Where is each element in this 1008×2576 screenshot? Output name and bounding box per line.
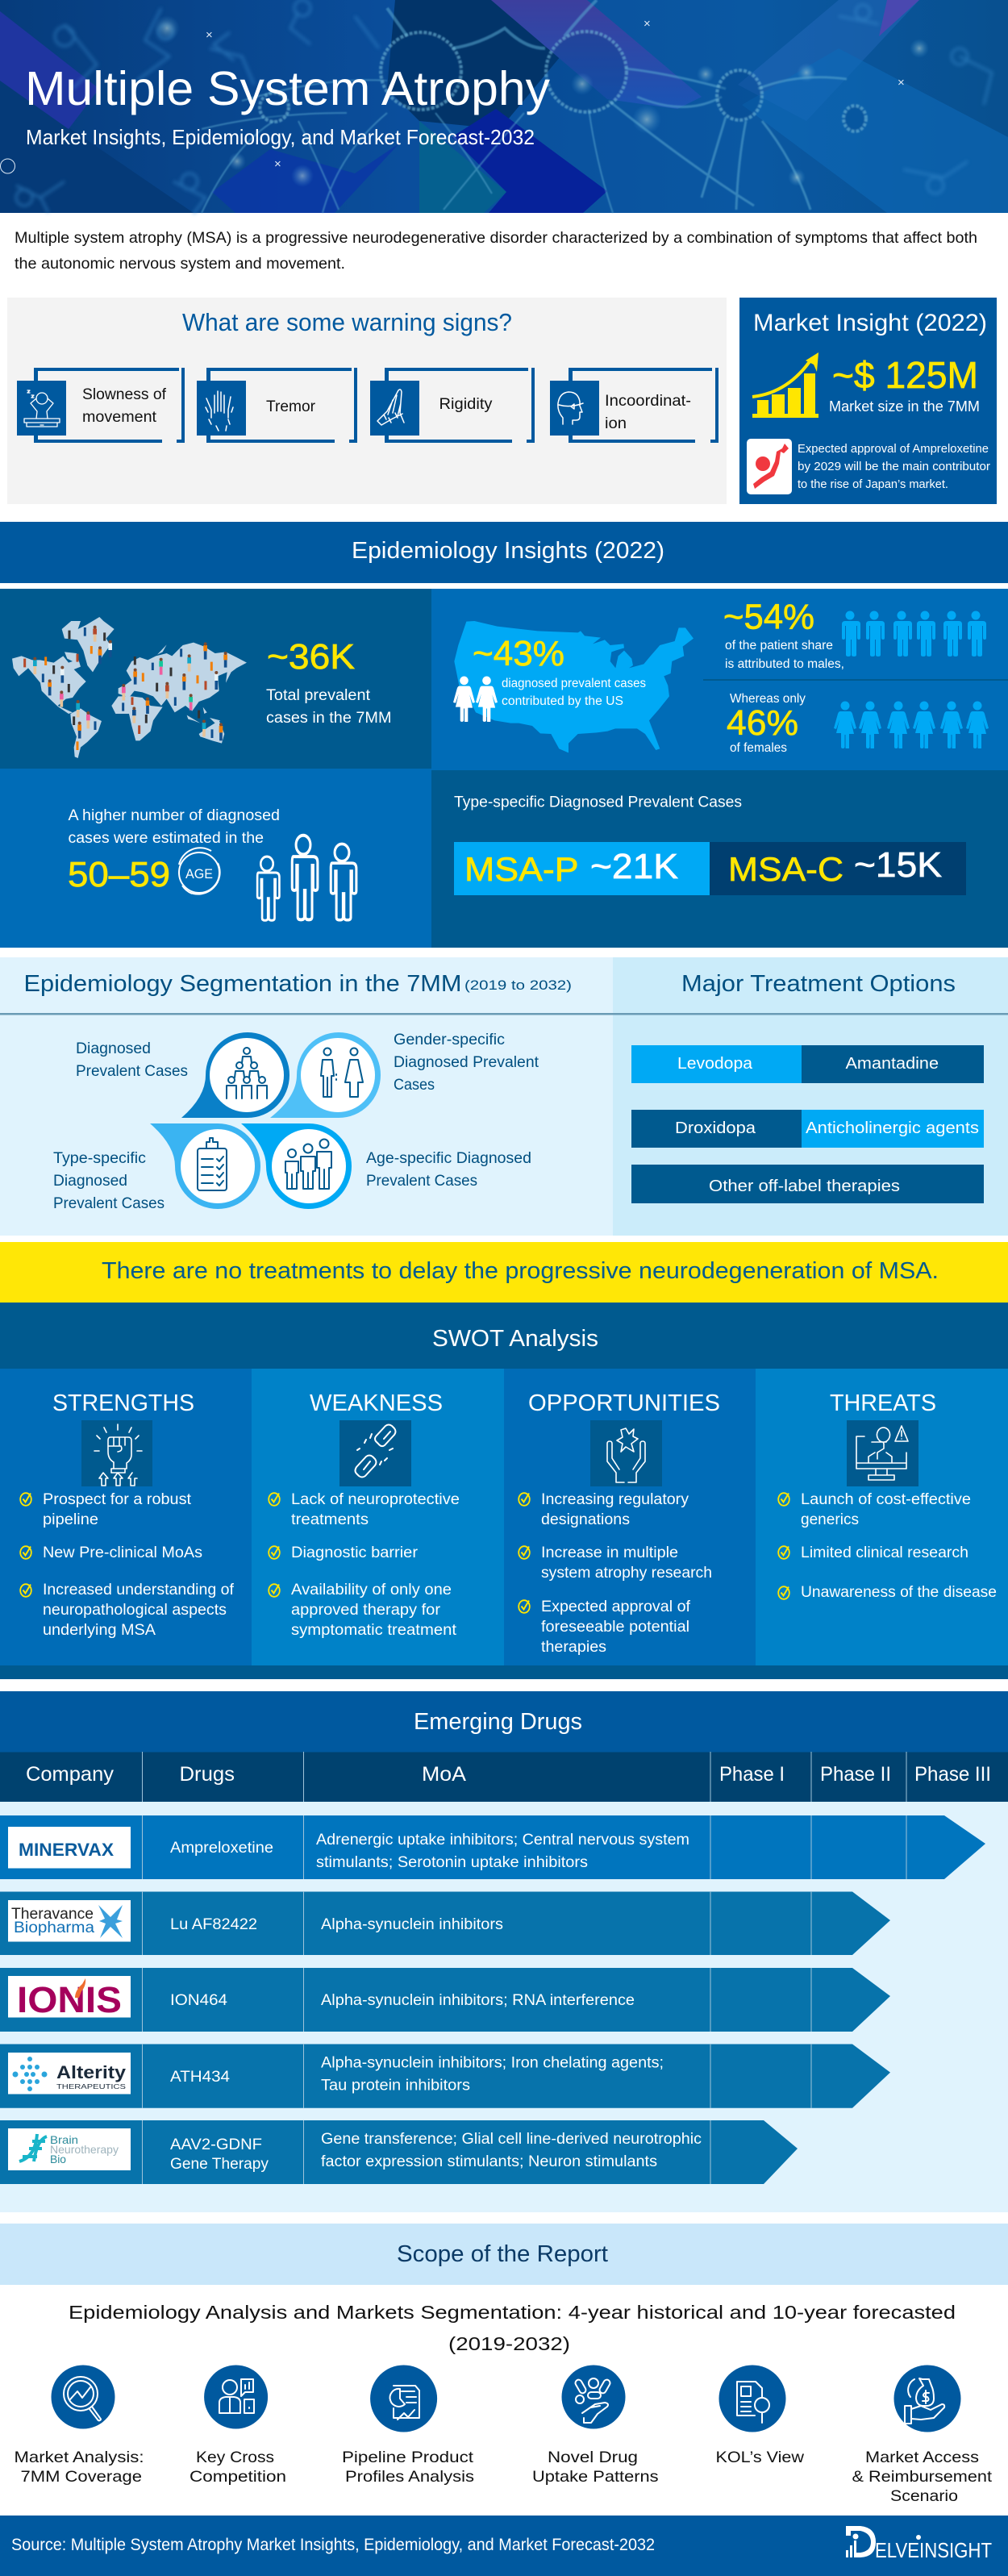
scope item: market analysis: Market Analysis: xyxy=(15,2449,144,2466)
header background: × xyxy=(644,17,651,31)
icon: row of women xyxy=(834,702,989,749)
column: weakness: WEAKNESS xyxy=(310,1390,443,1416)
column: strengths xyxy=(0,1369,252,1665)
card: slowness of movement: Slowness of xyxy=(82,386,167,403)
heading band: epidemiology insights xyxy=(0,522,1008,583)
scope summary text: (2019-2032) xyxy=(448,2333,570,2354)
icon: age badge xyxy=(179,848,220,894)
row: ion464: ION464 xyxy=(170,1992,227,2009)
row: ath434 xyxy=(0,2044,890,2108)
scope summary text: Epidemiology Analysis and Markets Segmentation: 4-year historical and 10-year forecasted xyxy=(69,2302,956,2323)
treatment: droxidopa xyxy=(631,1110,802,1148)
market size label: Market size in the 7MM xyxy=(829,398,980,415)
scope item: market access and reimbursement: Market Access xyxy=(865,2449,979,2466)
row: lu af82422: Lu AF82422 xyxy=(170,1916,257,1933)
total prevalent label: cases in the 7MM xyxy=(266,710,392,727)
logo: brain neurotherapy bio: Bio xyxy=(50,2153,66,2165)
label: age-specific cases: Age-specific Diagnosed xyxy=(366,1150,531,1167)
label: diagnosed prevalent cases xyxy=(76,1040,188,1080)
scope item: key cross competition xyxy=(190,2365,286,2486)
column: weakness: Availability of only one xyxy=(291,1582,452,1599)
logo: theravance biopharma: Biopharma xyxy=(14,1919,94,1936)
logo: minervax xyxy=(8,1827,131,1868)
label: gender-specific cases: Diagnosed Prevalent xyxy=(394,1054,539,1071)
msa-c box: MSA-C xyxy=(728,850,843,888)
scope item: novel drug uptake xyxy=(532,2365,659,2486)
scope item: kol's view xyxy=(716,2365,805,2466)
scope item: key cross competition: Competition xyxy=(190,2468,286,2486)
row: ampreloxetine: Ampreloxetine xyxy=(170,1840,273,1857)
card: slowness of movement: movement xyxy=(82,409,157,426)
msa-p box: MSA-P xyxy=(464,850,579,888)
male share label: is attributed to males, xyxy=(725,657,844,671)
column: strengths: Increased understanding of xyxy=(43,1582,235,1599)
card: incoordination: ion xyxy=(605,415,627,432)
type-specific heading: Type-specific Diagnosed Prevalent Cases xyxy=(454,794,742,811)
panel: type-specific cases xyxy=(431,770,1008,948)
msa-c box xyxy=(710,842,966,895)
world map with people xyxy=(12,617,247,758)
age text: A higher number of diagnosed xyxy=(68,807,280,824)
us share label: contributed by the US xyxy=(502,694,623,708)
segmentation heading: (2019 to 2032) xyxy=(464,977,572,993)
table header: Company xyxy=(26,1763,115,1786)
row: ath434: Tau protein inhibitors xyxy=(321,2078,470,2095)
msa-c box: ~15K xyxy=(854,845,942,885)
column: threats: generics xyxy=(801,1511,859,1528)
scope item: kol's view: KOL’s View xyxy=(716,2449,805,2466)
column: strengths: pipeline xyxy=(43,1511,98,1528)
row: ion464 xyxy=(0,1968,890,2032)
icon: three people outline xyxy=(257,836,356,920)
panel: major treatment options xyxy=(613,957,1008,1236)
column: strengths: Prospect for a robust xyxy=(43,1491,192,1508)
column: opportunities: therapies xyxy=(541,1639,606,1656)
logo: delveinsight: ELVEINSIGHT xyxy=(875,2538,992,2562)
us map xyxy=(454,621,694,752)
column: opportunities: OPPORTUNITIES xyxy=(528,1390,720,1416)
column: weakness: treatments xyxy=(291,1511,369,1528)
label: age-specific cases: Prevalent Cases xyxy=(366,1173,477,1190)
treatment: amantadine xyxy=(802,1045,984,1083)
logo: alterity xyxy=(8,2053,131,2094)
scope item: market analysis: 7MM Coverage xyxy=(21,2468,142,2486)
table header: Phase I xyxy=(719,1763,785,1786)
table header: MoA xyxy=(422,1763,466,1786)
table header: Phase III xyxy=(914,1763,991,1786)
column: weakness: approved therapy for xyxy=(291,1602,441,1619)
segmentation heading: Epidemiology Segmentation in the 7MM xyxy=(24,971,461,997)
treatment: other off-label therapies xyxy=(631,1165,984,1203)
icon: age badge: AGE xyxy=(185,866,213,882)
drop: gender-specific cases xyxy=(270,1032,381,1118)
logo: alterity: THERAPEUTICS xyxy=(56,2083,126,2090)
scope item: pipeline product profiles: Pipeline Product xyxy=(342,2449,474,2466)
treatment heading: Major Treatment Options xyxy=(681,971,956,997)
scope item: market analysis xyxy=(15,2365,144,2486)
column: opportunities: Increasing regulatory xyxy=(541,1491,689,1508)
scope item: market access and reimbursement: Scenario xyxy=(890,2487,958,2505)
age range value: 50–59 xyxy=(68,855,170,894)
label: diagnosed prevalent cases: Diagnosed xyxy=(76,1040,151,1057)
column: strengths: STRENGTHS xyxy=(52,1390,194,1416)
label: type-specific cases xyxy=(53,1150,165,1212)
title: Multiple System Atrophy xyxy=(25,62,551,115)
logo: delveinsight xyxy=(846,2526,992,2562)
header banner xyxy=(0,0,1008,214)
male share label: of the patient share xyxy=(725,639,833,652)
panel: emerging drugs xyxy=(0,1691,1008,2212)
column: strengths: New Pre-clinical MoAs xyxy=(43,1544,202,1561)
panel: total prevalent cases xyxy=(0,589,431,769)
row: ampreloxetine: Adrenergic uptake inhibitors; Central nervous system xyxy=(316,1832,689,1849)
card: rigidity: Rigidity xyxy=(439,396,493,413)
drop: age-specific cases xyxy=(241,1123,352,1209)
market size value: ~$ 125M xyxy=(832,354,978,396)
card: tremor xyxy=(197,368,357,443)
female share value: 46% xyxy=(727,703,798,743)
scope item: key cross competition: Key Cross xyxy=(196,2449,274,2466)
panel: age group xyxy=(0,769,431,948)
column: opportunities xyxy=(504,1369,756,1665)
column: threats: THREATS xyxy=(830,1390,936,1416)
subtitle: Market Insights, Epidemiology, and Market Forecast-2032 xyxy=(26,125,535,149)
row: ion464: Alpha-synuclein inhibitors; RNA interference xyxy=(321,1992,635,2009)
age text: cases were estimated in the xyxy=(68,830,264,847)
panel: epidemiology segmentation xyxy=(0,957,613,1236)
footer xyxy=(0,2516,1008,2576)
logo: ionis: IONIS xyxy=(17,1979,122,2020)
age text xyxy=(68,807,280,847)
scope item: market access and reimbursement xyxy=(852,2365,993,2505)
heading band: scope of the report: Scope of the Report xyxy=(397,2241,608,2267)
column: opportunities: designations xyxy=(541,1511,630,1528)
drop: diagnosed prevalent cases xyxy=(181,1032,289,1118)
label: type-specific cases: Diagnosed xyxy=(53,1173,127,1190)
logo: theravance biopharma xyxy=(8,1900,131,1942)
column: opportunities: Increase in multiple xyxy=(541,1544,678,1561)
logo: brain neurotherapy bio: Neurotherapy xyxy=(50,2143,119,2156)
header background: × xyxy=(274,157,281,171)
label: gender-specific cases: Cases xyxy=(394,1077,435,1094)
label: gender-specific cases: Gender-specific xyxy=(394,1032,505,1048)
emerging drugs heading xyxy=(0,1691,1008,1753)
icon: growth chart xyxy=(752,352,818,418)
column: opportunities: Expected approval of xyxy=(541,1599,691,1615)
emerging drugs heading: Emerging Drugs xyxy=(414,1709,582,1735)
callout: no treatments: There are no treatments to delay the progressive neurodegeneration of MSA. xyxy=(102,1258,939,1284)
us share label: diagnosed prevalent cases xyxy=(502,677,646,690)
card: incoordination xyxy=(550,368,719,443)
column: weakness xyxy=(252,1369,504,1665)
panel: market insight xyxy=(739,298,997,504)
table header: Phase II xyxy=(820,1763,891,1786)
treatment: levodopa: Levodopa xyxy=(677,1055,753,1073)
treatment: other off-label therapies: Other off-label therapies xyxy=(709,1178,900,1195)
japan note: to the rise of Japan’s market. xyxy=(798,478,948,491)
total prevalent label xyxy=(266,687,392,727)
japan note: by 2029 will be the main contributor xyxy=(798,461,990,473)
label: type-specific cases: Prevalent Cases xyxy=(53,1195,165,1212)
msa-p box xyxy=(454,842,710,895)
row: lu af82422 xyxy=(0,1891,890,1955)
row: aav2-gdnf gene therapy: factor expression stimulants; Neuron stimulants xyxy=(321,2153,657,2170)
treatment: levodopa xyxy=(631,1045,802,1083)
treatment: amantadine: Amantadine xyxy=(845,1055,939,1073)
source text: Source: Multiple System Atrophy Market Insights, Epidemiology, and Market Forecast-2032 xyxy=(11,2536,655,2554)
card: incoordination: Incoordinat- xyxy=(605,393,691,410)
intro text xyxy=(15,229,977,273)
label: diagnosed prevalent cases: Prevalent Cases xyxy=(76,1063,188,1080)
scope item: market access and reimbursement: & Reimbursement xyxy=(852,2468,993,2486)
row: aav2-gdnf gene therapy: AAV2-GDNF xyxy=(170,2136,262,2153)
column: weakness: symptomatic treatment xyxy=(291,1622,457,1639)
row: aav2-gdnf gene therapy: Gene transference; Glial cell line-derived neurotrophic xyxy=(321,2131,702,2148)
row: lu af82422: Alpha-synuclein inhibitors xyxy=(321,1916,503,1933)
us share value: ~43% xyxy=(473,634,564,673)
column: strengths: neuropathological aspects xyxy=(43,1602,227,1619)
table header xyxy=(0,1752,1008,1802)
japan note: Expected approval of Ampreloxetine xyxy=(798,443,989,456)
column: threats xyxy=(756,1369,1008,1665)
row: aav2-gdnf gene therapy: Gene Therapy xyxy=(170,2156,269,2173)
intro text: Multiple system atrophy (MSA) is a progressive neurodegenerative disorder characterized by a combination of symptoms that affect both xyxy=(15,229,977,247)
column: opportunities: system atrophy research xyxy=(541,1565,712,1582)
scope summary text xyxy=(69,2302,956,2354)
scope item: pipeline product profiles xyxy=(342,2365,474,2486)
column: threats: Unawareness of the disease xyxy=(801,1584,997,1601)
heading band: scope of the report xyxy=(0,2224,1008,2285)
icon: row of men xyxy=(842,611,986,657)
panel: swot analysis xyxy=(0,1303,1008,1679)
card: rigidity xyxy=(370,368,535,443)
header background: × xyxy=(206,28,213,42)
table header: Drugs xyxy=(179,1763,235,1786)
column: weakness: Lack of neuroprotective xyxy=(291,1491,460,1508)
icon: japan map xyxy=(747,439,792,494)
heading: warning signs: What are some warning signs? xyxy=(182,308,512,336)
heading: market insight: Market Insight (2022) xyxy=(753,310,987,336)
column: strengths: underlying MSA xyxy=(43,1622,156,1639)
msa-p box: ~21K xyxy=(590,847,678,886)
row: ath434: ATH434 xyxy=(170,2069,230,2086)
scope item: pipeline product profiles: Profiles Analysis xyxy=(345,2468,474,2486)
scope item: novel drug uptake: Uptake Patterns xyxy=(532,2468,659,2486)
treatment: anticholinergic agents xyxy=(802,1110,984,1148)
icon: two women xyxy=(453,677,498,723)
row: ampreloxetine xyxy=(0,1815,985,1879)
column: threats: Launch of cost-effective xyxy=(801,1491,971,1508)
column: threats: Limited clinical research xyxy=(801,1544,968,1561)
label: gender-specific cases xyxy=(394,1032,539,1094)
logo: brain neurotherapy bio xyxy=(8,2128,131,2170)
row: ampreloxetine: stimulants; Serotonin uptake inhibitors xyxy=(316,1854,588,1871)
heading band: epidemiology insights: Epidemiology Insights (2022) xyxy=(352,538,664,564)
header background: × xyxy=(898,76,905,90)
intro text: the autonomic nervous system and movement. xyxy=(15,255,345,273)
male share label xyxy=(725,639,844,671)
row: aav2-gdnf gene therapy xyxy=(0,2120,798,2184)
logo: brain neurotherapy bio: Brain xyxy=(50,2133,78,2146)
treatment: anticholinergic agents: Anticholinergic agents xyxy=(806,1119,979,1137)
label: age-specific cases xyxy=(366,1150,531,1190)
us share label xyxy=(502,677,646,708)
panel: us share and gender split xyxy=(431,589,1008,770)
female share label: of females xyxy=(730,741,787,755)
card: slowness of movement xyxy=(17,368,185,443)
total prevalent value: ~36K xyxy=(267,637,355,677)
male share value: ~54% xyxy=(723,597,814,637)
swot heading: SWOT Analysis xyxy=(432,1326,598,1352)
treatment: droxidopa: Droxidopa xyxy=(675,1119,756,1137)
logo: alterity: Alterity xyxy=(56,2062,127,2082)
header background xyxy=(0,0,1008,214)
total prevalent label: Total prevalent xyxy=(266,687,371,704)
japan note xyxy=(798,443,990,491)
card: tremor: Tremor xyxy=(266,398,316,415)
callout: no treatments xyxy=(0,1242,1008,1303)
panel: warning signs xyxy=(7,298,727,504)
logo: theravance biopharma: Theravance xyxy=(11,1906,94,1923)
column: opportunities: foreseeable potential xyxy=(541,1619,689,1636)
female share intro: Whereas only xyxy=(730,692,806,706)
column: weakness: Diagnostic barrier xyxy=(291,1544,419,1561)
label: type-specific cases: Type-specific xyxy=(53,1150,146,1167)
row: ath434: Alpha-synuclein inhibitors; Iron chelating agents; xyxy=(321,2055,664,2071)
scope item: novel drug uptake: Novel Drug xyxy=(548,2449,638,2466)
drop: type-specific cases xyxy=(150,1123,260,1209)
logo: minervax: MINERVAX xyxy=(19,1840,114,1860)
